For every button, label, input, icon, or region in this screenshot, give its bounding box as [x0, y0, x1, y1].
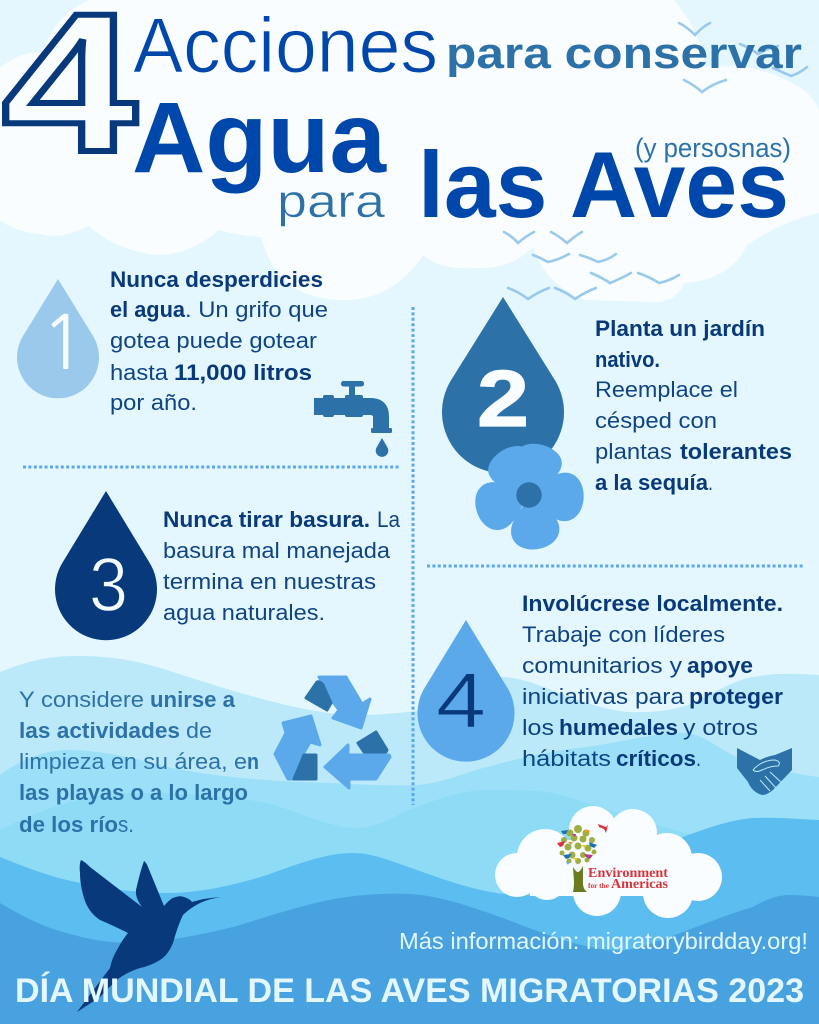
text: nunca tirar basura: agua naturales. — [163, 600, 325, 625]
text: nunca desperdicies: 11,000 litros — [174, 360, 312, 385]
text: involucrese localmente: críticos — [616, 746, 696, 771]
icon: flower — [469, 439, 585, 553]
text: planta un jardin: tolerantes — [680, 439, 792, 464]
text: involucrese localmente: humedales — [559, 715, 678, 740]
text: nunca tirar basura: basura mal manejada — [163, 538, 391, 563]
text: nunca desperdicies: hasta — [110, 360, 169, 385]
logo text: Americas — [611, 877, 669, 892]
logo text: for the — [588, 882, 609, 890]
title: Acciones: Acciones — [133, 1, 438, 89]
dotted dividers — [23, 307, 804, 805]
panel 1: never waste water — [17, 267, 392, 457]
text: cleanup activities: las playas o a lo largo — [19, 780, 248, 805]
text: involucrese localmente: Involúcrese localmente. — [522, 591, 783, 616]
logo tree — [557, 824, 608, 892]
text: involucrese localmente: apoye — [687, 653, 753, 678]
text: nunca tirar basura — [163, 507, 401, 625]
header cloud — [0, 0, 819, 302]
footer title: DÍA MUNDIAL DE LAS AVES MIGRATORIAS 2023 — [15, 972, 804, 1010]
text: planta un jardin: a la sequía — [595, 470, 709, 495]
text: involucrese localmente: hábitats — [522, 746, 611, 771]
logo text — [588, 866, 669, 892]
text: planta un jardin: . — [708, 470, 713, 495]
text: planta un jardin: plantas — [595, 439, 672, 464]
text: cleanup activities: las actividades — [19, 718, 180, 743]
text: planta un jardin: césped con — [595, 408, 717, 433]
logo cloud — [495, 806, 722, 918]
title: y personas note: (y persosnas) — [635, 133, 791, 163]
text: nunca desperdicies — [110, 267, 328, 415]
text: planta un jardin — [595, 316, 792, 495]
text: involucrese localmente — [522, 591, 783, 771]
text: cleanup activities: Y considere — [19, 687, 144, 712]
text: involucrese localmente: comunitarios y — [522, 653, 682, 678]
panel 3: never litter — [55, 491, 401, 640]
title: para conservar: para conservar — [446, 29, 802, 78]
text: nunca tirar basura: Nunca tirar basura. — [163, 507, 370, 532]
panel 4: get involved — [418, 591, 792, 795]
water waves — [0, 656, 819, 1024]
text: planta un jardin: Reemplace el — [595, 377, 738, 402]
title: Agua: Agua — [132, 82, 387, 194]
text: cleanup activities: s. — [118, 812, 134, 837]
text: nunca desperdicies: por año. — [110, 390, 197, 415]
icon: faucet — [314, 381, 392, 457]
text: planta un jardin: Planta un jardín — [595, 316, 765, 341]
text: cleanup activities — [19, 687, 259, 837]
text: planta un jardin: nativo. — [595, 347, 660, 372]
text: nunca desperdicies: . Un grifo que — [185, 297, 328, 322]
icon: handshake — [737, 748, 792, 795]
drop 4: 4 — [436, 656, 486, 744]
hummingbird silhouette — [77, 860, 221, 1012]
title: las Aves: las Aves — [418, 132, 789, 237]
text: cleanup activities: de los río — [19, 812, 118, 837]
drop 2: 2 — [477, 354, 529, 443]
text: involucrese localmente: los — [522, 715, 554, 740]
text: nunca tirar basura: La — [377, 507, 401, 532]
text: cleanup activities: limpieza en su área, e — [19, 749, 247, 774]
text: involucrese localmente: Trabaje con líderes — [522, 622, 725, 647]
text: nunca desperdicies: Nunca desperdicies — [110, 267, 323, 292]
text: cleanup activities: unirse a — [150, 687, 236, 712]
text: nunca tirar basura: termina en nuestras — [163, 569, 376, 594]
text: involucrese localmente: iniciativas para — [522, 684, 685, 709]
icon: recycle — [275, 677, 390, 788]
drop 3: 3 — [89, 543, 128, 628]
birds flock: centre — [504, 232, 679, 299]
logo: Environment for the Americas — [557, 824, 669, 892]
text: cleanup activities: n — [247, 749, 259, 774]
more info link text: Más información: migratorybirdday.org! — [399, 928, 808, 954]
drop 3 — [55, 491, 157, 640]
text: nunca desperdicies: el agua — [110, 297, 186, 322]
text: involucrese localmente: proteger — [689, 684, 783, 709]
text: involucrese localmente: y otros — [683, 715, 758, 740]
logo text: Environment — [588, 866, 668, 881]
birds flock: top right — [679, 23, 807, 92]
drop 1 — [17, 279, 99, 398]
drop 4 — [418, 620, 514, 762]
drop 1: 1 — [41, 306, 86, 380]
text: involucrese localmente: . — [696, 746, 701, 771]
text: nunca desperdicies: gotea puede gotear — [110, 328, 317, 353]
title: para: para — [277, 175, 385, 227]
panel 2: plant a native garden — [442, 297, 792, 553]
text: cleanup activities: de — [186, 718, 212, 743]
drop 2 — [442, 297, 564, 473]
